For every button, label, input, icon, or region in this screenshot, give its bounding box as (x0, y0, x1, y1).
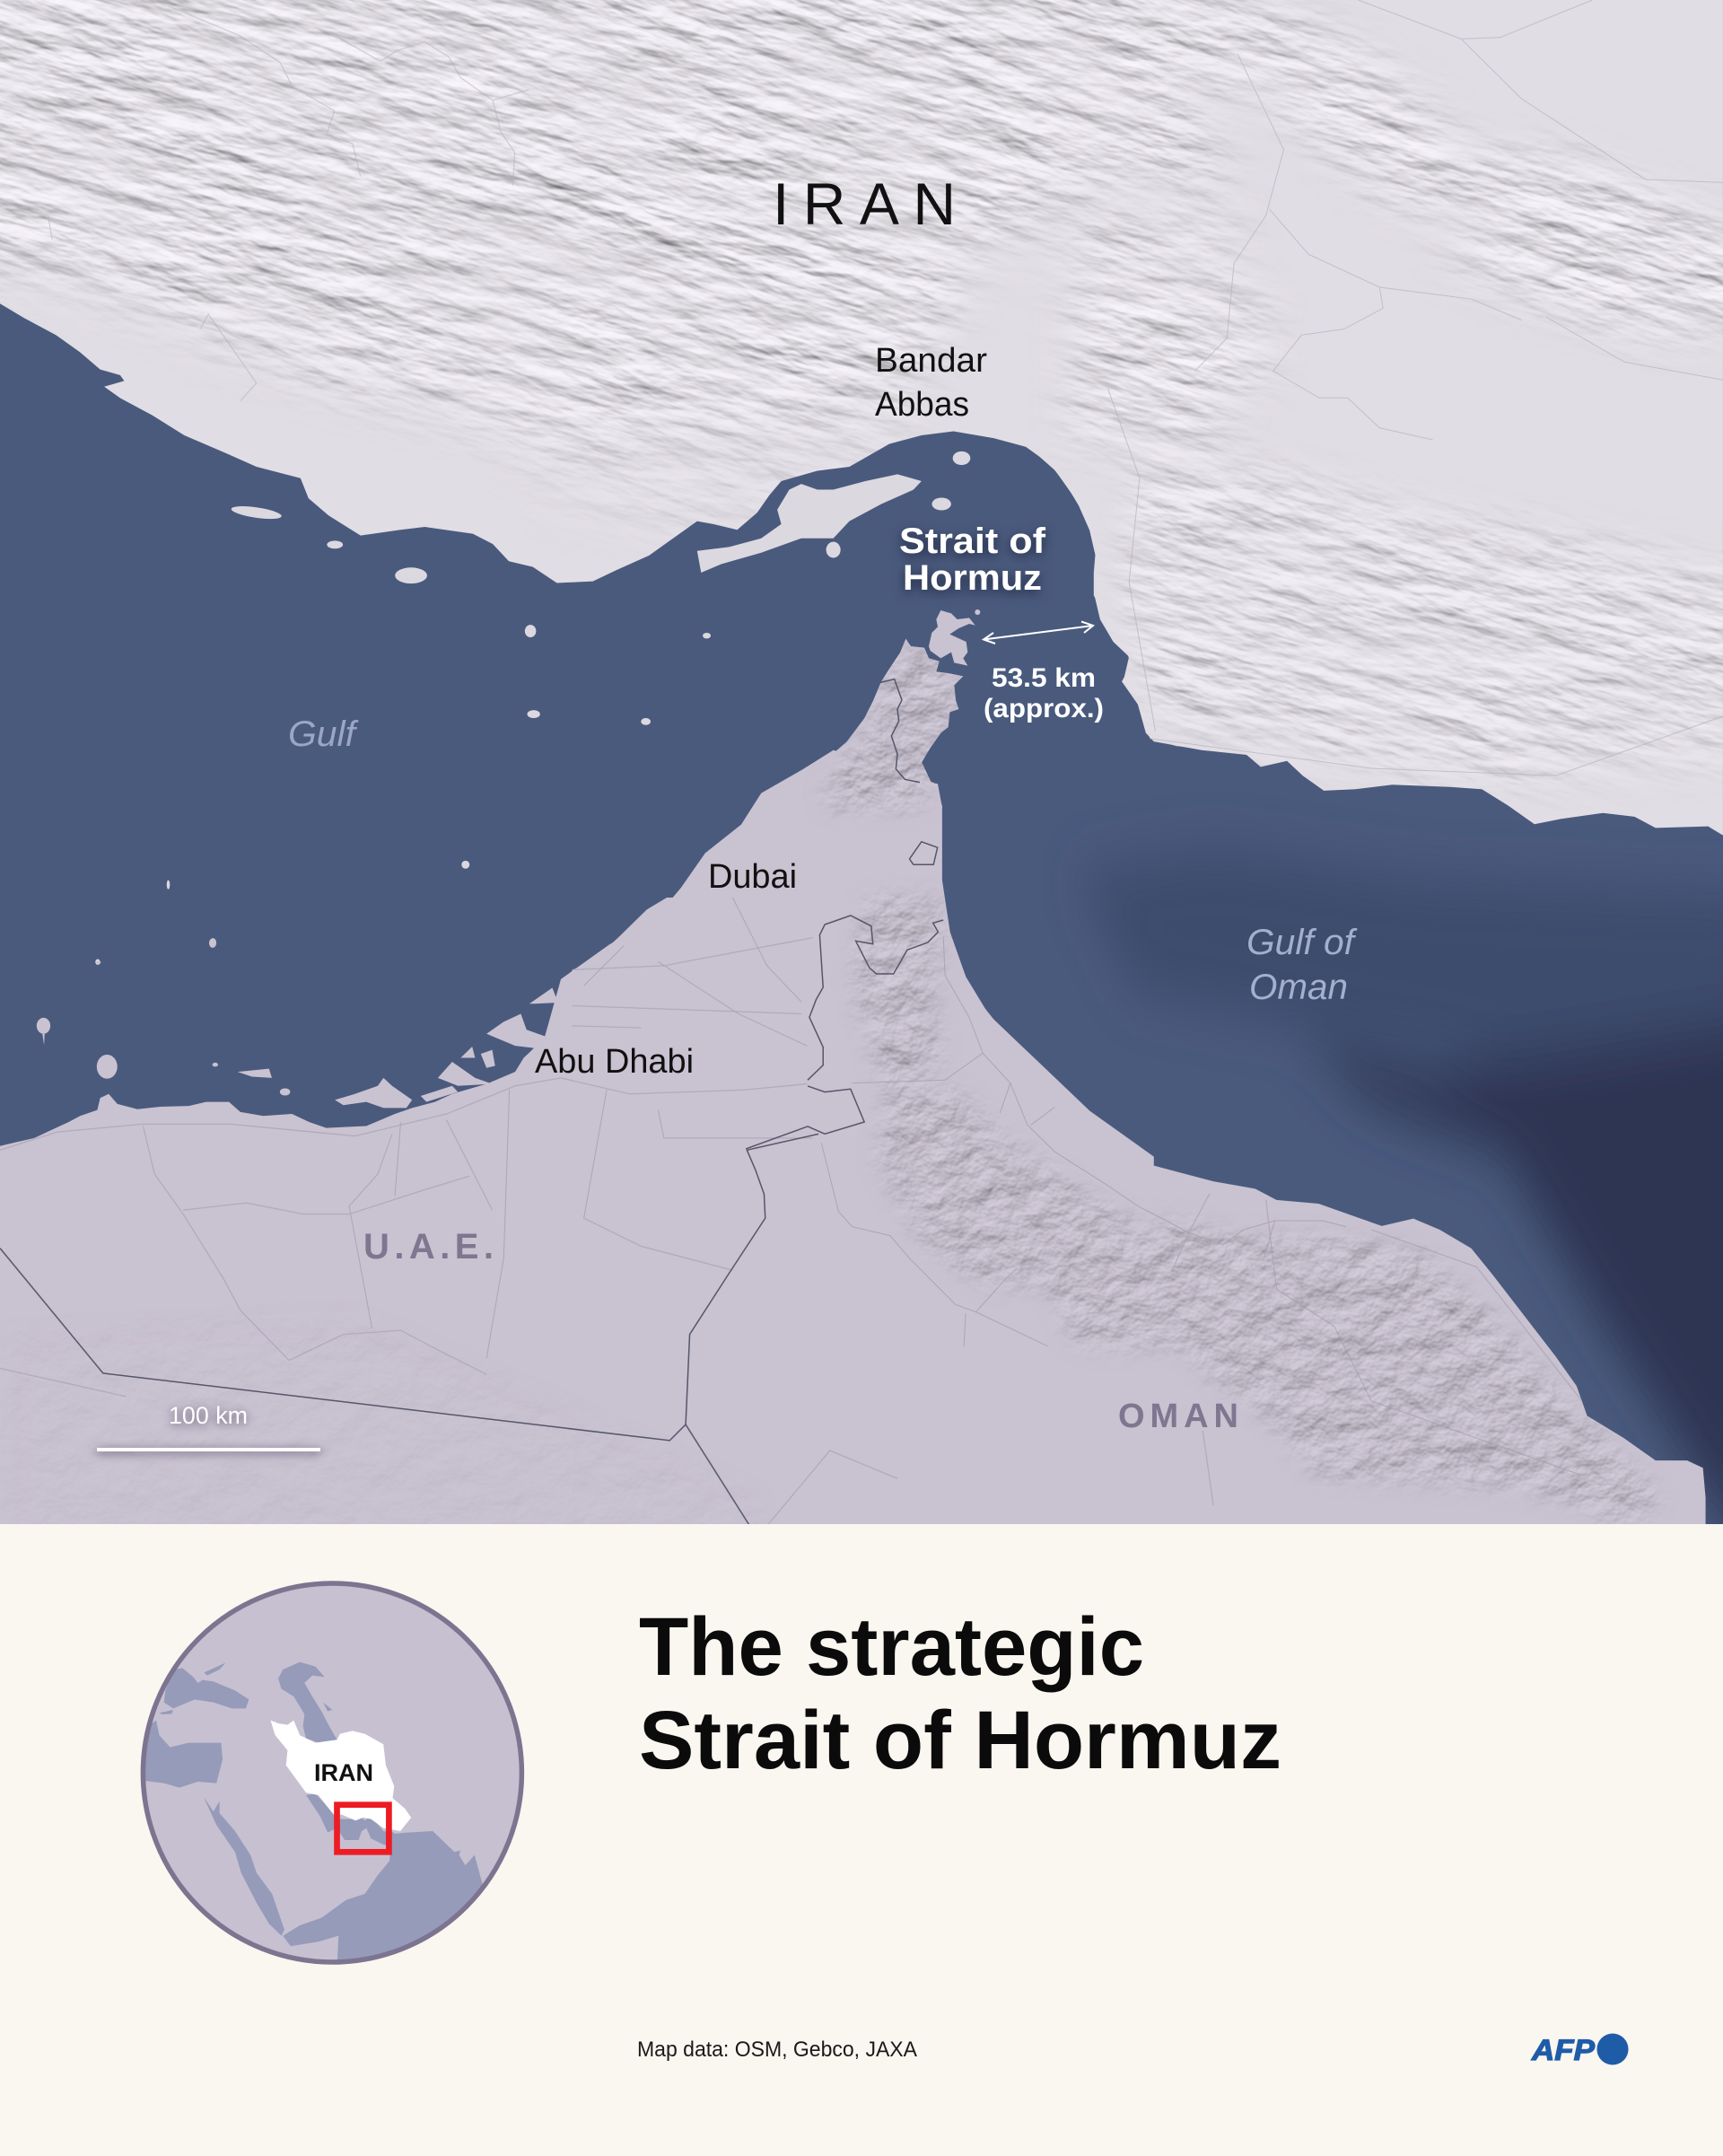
sea label: Gulf: Gulf (288, 714, 359, 754)
country label: OMAN: OMAN (1118, 1398, 1238, 1435)
road network: U.A.E. and Oman (0, 898, 1582, 1526)
title: Strait of Hormuz (639, 1695, 1281, 1786)
sea label: Gulf of Oman (1246, 923, 1358, 1007)
AFP logo (1531, 2034, 1628, 2066)
islands of the Gulf (95, 451, 970, 965)
inset border ring (143, 1583, 521, 1962)
strait width label: 53.5 km (992, 663, 1096, 693)
international borders (0, 679, 943, 1526)
country label: IRAN: IRAN (773, 171, 956, 237)
city label: Dubai: Dubai (708, 858, 797, 896)
sea label: Gulf of Oman: Oman (1249, 968, 1348, 1007)
strait label with shadow (899, 521, 1046, 598)
scale bar: 100 km (169, 1402, 248, 1429)
source credit: Map data: OSM, Gebco, JAXA (637, 2038, 917, 2062)
title (639, 1601, 1281, 1786)
Musandam islets (929, 609, 980, 666)
terrain relief: Oman mountains (196, 646, 1660, 1524)
country label: U.A.E.: U.A.E. (363, 1227, 494, 1266)
AFP logo: AFP (1531, 2034, 1596, 2066)
land: Iran (0, 0, 1723, 836)
locator inset and title block (140, 1581, 1628, 2064)
sea: Gulf and Gulf of Oman (0, 0, 1723, 1624)
locator inset map (139, 1583, 522, 1968)
inset seas (145, 1662, 483, 1960)
strait width label (984, 663, 1104, 723)
strait label with shadow: Hormuz (903, 558, 1042, 598)
city label: Bandar Abbas: Bandar (875, 342, 987, 380)
road network: Iran (48, 0, 1723, 776)
width arrow across the strait (984, 621, 1093, 644)
islands off Abu Dhabi (37, 938, 558, 1108)
strait width label: (approx.) (984, 694, 1104, 723)
inset land disc (143, 1583, 521, 1962)
inset label: IRAN: IRAN (314, 1759, 373, 1786)
terrain relief: Iran (0, 0, 1723, 795)
title: The strategic (639, 1601, 1144, 1693)
city label: Abu Dhabi: Abu Dhabi (535, 1043, 694, 1081)
city label: Bandar Abbas (875, 342, 987, 424)
land: Arabian Peninsula (0, 639, 1706, 1526)
city label: Bandar Abbas: Abbas (875, 386, 969, 424)
sea label: Gulf of Oman: Gulf of (1246, 923, 1358, 962)
main map panel (0, 0, 1723, 1524)
strait label with shadow: Strait of (899, 521, 1046, 561)
scale bar (97, 1402, 320, 1451)
deep water shading (1076, 850, 1723, 1624)
inset Iran highlighted (270, 1721, 411, 1831)
inset red locator box (337, 1805, 389, 1852)
